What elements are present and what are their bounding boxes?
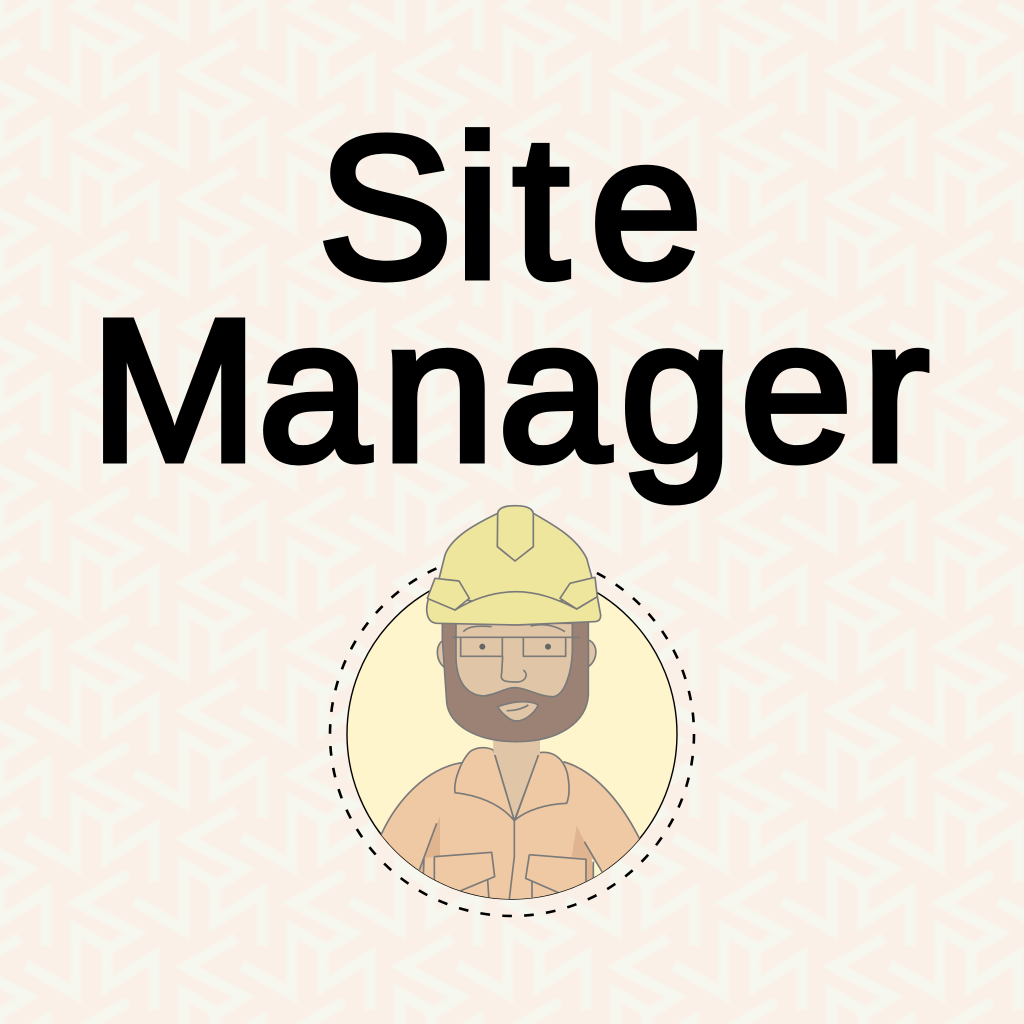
right underarm gap (592, 858, 603, 878)
eyes (479, 644, 551, 650)
mouth (498, 702, 538, 721)
portrait disc (347, 569, 677, 899)
face (456, 623, 572, 697)
hard hat dome (435, 513, 597, 608)
glasses (452, 637, 580, 656)
left pocket (434, 852, 495, 900)
neck lines (493, 750, 540, 821)
arm lines (419, 823, 603, 878)
left arm shading (419, 816, 440, 877)
title (90, 94, 929, 503)
dashed ring (330, 552, 694, 916)
title: Site (318, 94, 702, 320)
title: Manager (90, 277, 929, 503)
worker head (427, 506, 601, 755)
hard hat right tab (560, 577, 597, 609)
left collar (455, 748, 514, 821)
neck (493, 740, 538, 818)
placket (509, 821, 514, 902)
eyebrows (463, 625, 565, 632)
right pocket (526, 855, 586, 900)
hard hat brim (427, 592, 601, 625)
nose (501, 656, 526, 682)
worker torso (380, 740, 640, 899)
jacket body (381, 762, 640, 899)
right arm shading (572, 826, 594, 883)
neck top (493, 737, 540, 755)
right collar (515, 752, 569, 820)
hard hat ridge (497, 506, 533, 561)
lip line (507, 705, 528, 711)
jacket outline (380, 760, 640, 840)
beard (442, 620, 588, 742)
ears (437, 640, 596, 668)
hard hat left tab (427, 578, 469, 610)
